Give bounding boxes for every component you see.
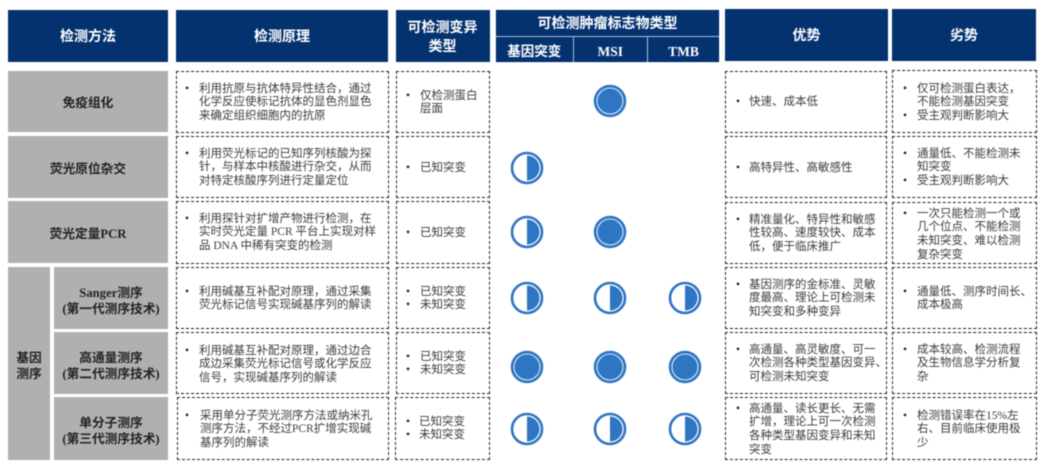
disadvantage box: row 4 xyxy=(892,267,1037,329)
text: • xyxy=(185,410,189,422)
disadvantage text: row 4: 通量低、测序时间长、 xyxy=(917,286,1032,298)
disadvantage text: row 4: 成本极高 xyxy=(917,299,963,311)
subheader: MSI: MSI xyxy=(597,44,623,58)
method: 荧光定量PCR: 荧光定量PCR xyxy=(50,226,126,240)
method: Sanger测序: (第一代测序技术) xyxy=(62,302,160,316)
method: 单分子测序: (第三代测序技术) xyxy=(62,432,160,446)
disadvantage text: row 1: 不能检测基因突变 xyxy=(917,96,1009,108)
principle text: row 6: 采用单分子荧光测序方法或纳米孔 xyxy=(200,410,372,422)
header backing: light cell separators xyxy=(496,10,719,62)
variant text: row 5: 未知突变 xyxy=(420,364,466,376)
text: • xyxy=(406,286,410,298)
text: • xyxy=(903,148,907,160)
method: Sanger测序: Sanger测序 xyxy=(79,286,143,300)
icon: half circle, row 6 MSI xyxy=(592,412,628,446)
principle text: row 1: 来确定组织细胞内的抗原 xyxy=(199,110,326,122)
advantage text: row 6 xyxy=(736,402,876,456)
text: • xyxy=(406,162,410,174)
header: 检测原理 xyxy=(176,10,388,62)
principle text: row 4: 利用碱基互补配对原理，通过采集 xyxy=(199,286,372,298)
variant text: row 4: 已知突变 xyxy=(420,286,466,298)
text: • xyxy=(185,344,189,356)
disadvantage text: row 6 xyxy=(902,408,1020,449)
disadvantage text: row 2: 通量低、不能检测未 xyxy=(917,148,1020,160)
header: 检测方法 xyxy=(8,10,168,62)
advantage box: row 1 xyxy=(725,70,887,132)
advantage text: row 4 xyxy=(736,278,876,318)
disadvantage text: row 3 xyxy=(902,206,1021,261)
icon: half circle, row 6 gene xyxy=(510,412,544,446)
text: • xyxy=(185,286,189,298)
method: 免疫组化: 免疫组化 xyxy=(63,96,113,110)
text: • xyxy=(406,416,410,428)
text: • xyxy=(903,175,907,187)
icon: half circle, row 3 gene xyxy=(510,215,544,249)
advantage text: row 3: 低，便于临床推广 xyxy=(749,241,841,253)
subheader: MSI xyxy=(574,37,646,62)
variant text: row 1: 层面 xyxy=(420,103,443,115)
text: • xyxy=(903,208,907,220)
advantage text: row 4: 度最高、理论上可检测未 xyxy=(749,292,876,304)
variant text: row 6: 未知突变 xyxy=(419,429,465,441)
disadvantage text: row 2 xyxy=(902,146,1020,187)
variant text: row 5 xyxy=(406,350,466,376)
variant text: row 4: 未知突变 xyxy=(420,299,466,311)
subheader: TMB xyxy=(648,37,719,62)
disadvantage text: row 1: 受主观判断影响大 xyxy=(917,110,1009,122)
principle text: row 2: 对特定核酸序列进行定量定位 xyxy=(199,175,348,187)
text: • xyxy=(406,429,410,441)
disadvantage text: row 1 xyxy=(902,82,1020,122)
text: • xyxy=(903,82,907,94)
variant box: row 4 xyxy=(396,267,490,329)
method: 免疫组化 xyxy=(8,71,168,132)
header: 检测方法: 检测方法 xyxy=(60,30,116,45)
principle text: row 6: 测序方法，不经过PCR扩增实现碱 xyxy=(200,423,371,435)
advantage text: row 5: 高通量、高灵敏度、可一 xyxy=(749,344,876,356)
icon: full circle, row 5 MSI xyxy=(592,350,628,384)
text: • xyxy=(406,299,410,311)
advantage text: row 6: 突变 xyxy=(749,444,772,456)
variant box: row 6 xyxy=(394,397,490,460)
advantage text: row 5: 可检测未知突变 xyxy=(749,371,830,383)
subheader: 基因突变: 基因突变 xyxy=(507,44,561,58)
disadvantage text: row 2: 知突变 xyxy=(917,161,952,173)
text: • xyxy=(406,364,410,376)
variant box: row 2 xyxy=(396,136,490,198)
variant text: row 5: 已知突变 xyxy=(420,350,466,362)
disadvantage box: row 3 xyxy=(892,202,1037,264)
principle text: row 4 xyxy=(184,284,372,311)
variant box: row 1 xyxy=(396,70,490,132)
icon: half circle, row 4 TMB xyxy=(668,281,702,315)
header: 优势: 优势 xyxy=(792,29,820,44)
text: • xyxy=(736,214,740,226)
principle box: row 2 xyxy=(176,136,388,198)
text: • xyxy=(406,90,410,102)
disadvantage box: row 6 xyxy=(892,397,1037,460)
variant text: row 1: 仅检测蛋白 xyxy=(420,90,478,102)
advantage text: row 3: 精准量化、特异性和敏感 xyxy=(749,214,876,226)
advantage box: row 6 xyxy=(725,397,887,460)
advantage box: row 4 xyxy=(725,267,887,329)
icon: full circle, row 1 MSI xyxy=(592,84,628,118)
header: 可检测变异类型: 可检测变异 xyxy=(408,20,478,36)
disadvantage text: row 6: 少 xyxy=(917,437,928,449)
disadvantage text: row 5: 杂 xyxy=(917,371,928,383)
variant text: row 2: 已知突变 xyxy=(420,162,466,174)
disadvantage box: row 5 xyxy=(892,332,1037,394)
disadvantage text: row 6: 右、目前临床使用极 xyxy=(917,423,1020,435)
disadvantage box: row 1 xyxy=(892,70,1037,132)
disadvantage box: row 2 xyxy=(892,136,1037,198)
advantage text: row 6: 高通量、读长更长、无需 xyxy=(749,402,876,414)
principle text: row 1 xyxy=(184,82,372,122)
advantage text: row 4: 知突变和多种变异 xyxy=(749,306,841,318)
principle text: row 3: 实时荧光定量 PCR 平台上实现对样 xyxy=(199,226,376,238)
principle text: row 1: 利用抗原与抗体特异性结合，通过 xyxy=(199,82,372,94)
advantage box: row 3 xyxy=(725,202,887,264)
method: 荧光定量PCR xyxy=(8,201,168,263)
text: • xyxy=(903,410,907,422)
principle text: row 5: 信号，实现碱基序列的解读 xyxy=(199,372,337,384)
icon: half circle, row 2 gene xyxy=(510,151,544,185)
icon: half circle, row 4 MSI xyxy=(592,281,628,315)
method group: 基因测序: 基因 xyxy=(16,350,42,364)
text: • xyxy=(736,344,740,356)
advantage text: row 6: 扩增，理论上可一次检测 xyxy=(749,416,876,428)
subheader: 基因突变 xyxy=(496,37,572,62)
advantage text: row 5: 次检测各种类型基因变异、 xyxy=(749,357,887,369)
variant box: row 5 xyxy=(396,332,490,394)
header: 可检测变异类型: 类型 xyxy=(428,40,456,54)
advantage text: row 5 xyxy=(736,342,887,383)
principle box: row 5 xyxy=(176,332,388,394)
principle text: row 1: 化学反应使标记抗体的显色剂显色 xyxy=(199,96,372,108)
variant text: row 4 xyxy=(406,284,466,311)
text: • xyxy=(903,286,907,298)
disadvantage text: row 4 xyxy=(902,284,1032,311)
principle text: row 6: 基序列的解读 xyxy=(200,437,269,449)
header: 可检测肿瘤标志物类型: 可检测肿瘤标志物类型 xyxy=(538,17,678,32)
disadvantage text: row 3: 几个位点、不能检测 xyxy=(917,221,1020,233)
text: • xyxy=(736,96,740,108)
method: Sanger测序 xyxy=(54,267,168,329)
method: 单分子测序 xyxy=(54,397,168,460)
icon: half circle, row 4 gene xyxy=(510,281,544,315)
disadvantage text: row 3: 复杂突变 xyxy=(917,249,963,261)
disadvantage text: row 5: 及生物信息学分析复 xyxy=(917,357,1020,369)
advantage text: row 3: 性较高、速度较快、成本 xyxy=(749,227,876,239)
principle text: row 2 xyxy=(184,146,372,187)
principle text: row 3: 品 DNA 中稀有突变的检测 xyxy=(199,240,333,252)
text: • xyxy=(736,162,740,174)
principle text: row 5 xyxy=(184,344,372,384)
disadvantage text: row 5 xyxy=(902,342,1021,383)
principle text: row 2: 利用荧光标记的已知序列核酸为探 xyxy=(199,148,372,160)
header: 劣势 xyxy=(892,9,1036,61)
principle box: row 4 xyxy=(176,267,388,329)
principle box: row 1 xyxy=(176,70,388,132)
text: • xyxy=(903,110,907,122)
text: • xyxy=(736,402,740,414)
advantage text: row 4: 基因测序的金标准、灵敏 xyxy=(749,278,876,290)
method: 高通量测序: 高通量测序 xyxy=(79,350,143,364)
advantage box: row 5 xyxy=(725,332,887,394)
text: • xyxy=(185,82,189,94)
variant text: row 6: 已知突变 xyxy=(419,416,465,428)
header: 可检测肿瘤标志物类型 xyxy=(496,10,719,36)
advantage box: row 2 xyxy=(725,136,887,198)
header: 可检测变异类型 xyxy=(396,10,490,62)
method: 高通量测序 xyxy=(54,332,168,394)
principle box: row 3 xyxy=(176,201,388,264)
method: 荧光原位杂交 xyxy=(8,136,168,198)
text: • xyxy=(185,148,189,160)
icon: half circle, row 6 TMB xyxy=(668,412,702,446)
principle text: row 3 xyxy=(184,212,376,252)
principle text: row 5: 成边采集荧光标记信号或化学反应 xyxy=(199,358,372,370)
disadvantage text: row 1: 仅可检测蛋白表达， xyxy=(917,82,1020,94)
text: • xyxy=(736,278,740,290)
text: • xyxy=(903,344,907,356)
principle text: row 2: 针，与样本中核酸进行杂交，从而 xyxy=(199,161,372,173)
advantage text: row 6: 各种类型基因变异和未知 xyxy=(749,430,876,442)
advantage text: row 2: 高特异性、高敏感性 xyxy=(749,162,852,174)
subheader: TMB: TMB xyxy=(668,44,699,58)
principle text: row 3: 利用探针对扩增产物进行检测，在 xyxy=(199,212,372,224)
method: 高通量测序: (第二代测序技术) xyxy=(62,366,160,380)
header: 检测原理: 检测原理 xyxy=(254,30,310,45)
header: 优势 xyxy=(725,9,888,61)
text: • xyxy=(406,350,410,362)
method group: 基因测序: 测序 xyxy=(16,366,42,380)
advantage text: row 3 xyxy=(736,212,876,253)
text: • xyxy=(185,212,189,224)
disadvantage text: row 3: 一次只能检测一个或 xyxy=(917,208,1020,220)
icon: full circle, row 3 MSI xyxy=(592,215,628,249)
principle text: row 4: 荧光标记信号实现碱基序列的解读 xyxy=(199,299,372,311)
disadvantage text: row 2: 受主观判断影响大 xyxy=(917,175,1009,187)
variant text: row 3: 已知突变 xyxy=(420,226,466,238)
icon: full circle, row 5 TMB xyxy=(668,350,702,384)
header: 劣势: 劣势 xyxy=(950,29,978,44)
text: • xyxy=(406,226,410,238)
disadvantage text: row 3: 未知突变、难以检测 xyxy=(917,235,1020,247)
principle box: row 6 xyxy=(176,397,388,460)
method: 单分子测序: 单分子测序 xyxy=(79,416,143,430)
advantage text: row 1: 快速、成本低 xyxy=(749,96,818,108)
variant box: row 3 xyxy=(396,201,490,264)
method group: 基因测序 xyxy=(8,267,50,460)
variant text: row 1 xyxy=(406,88,478,115)
icon: full circle, row 5 gene xyxy=(510,350,544,384)
principle text: row 5: 利用碱基互补配对原理，通过边合 xyxy=(199,344,372,356)
disadvantage text: row 6: 检测错误率在15%左 xyxy=(917,410,1019,422)
disadvantage text: row 5: 成本较高、检测流程 xyxy=(917,344,1020,356)
method: 荧光原位杂交: 荧光原位杂交 xyxy=(50,162,126,176)
variant text: row 6 xyxy=(406,414,465,441)
principle text: row 6 xyxy=(184,408,373,449)
